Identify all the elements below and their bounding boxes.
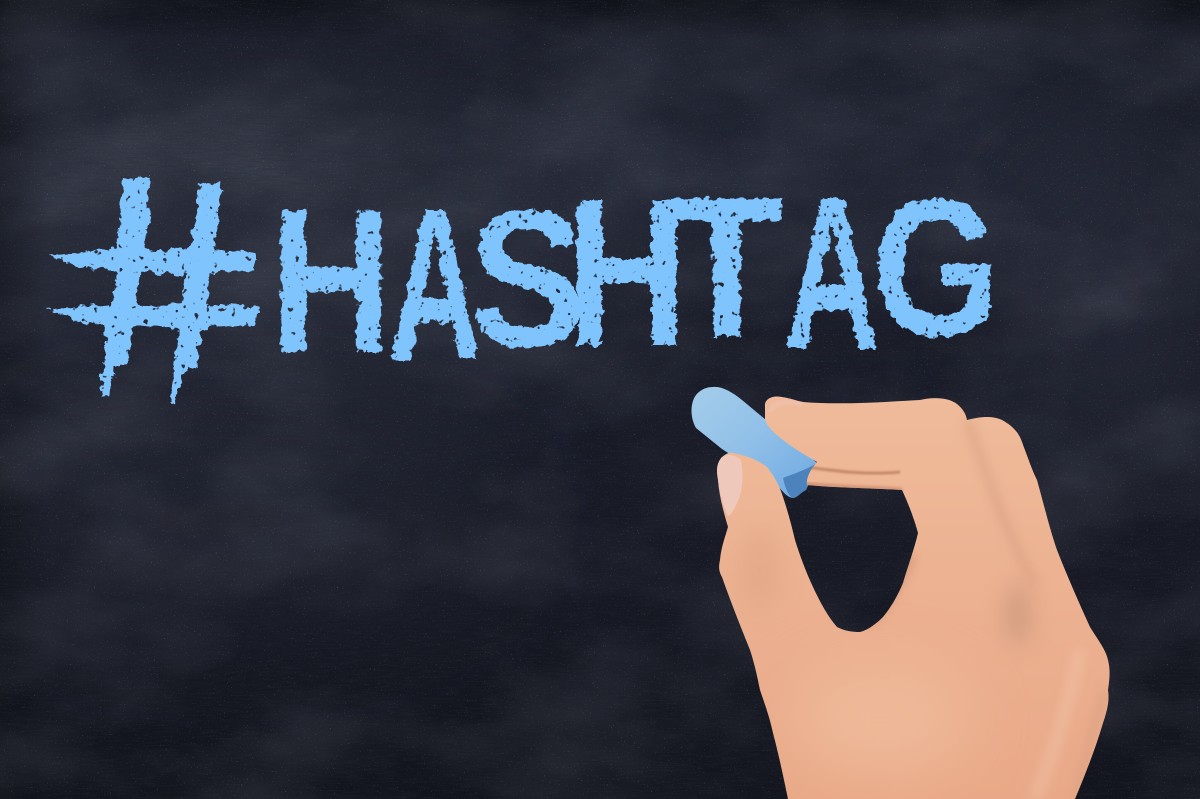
- letter G: G: [872, 159, 1000, 377]
- letter A: A: [784, 152, 880, 395]
- letter H: H: [270, 165, 392, 396]
- thumbnail: [717, 455, 743, 516]
- letter H: H: [567, 156, 687, 390]
- hash symbol: #: [57, 159, 266, 416]
- icon: blue chalk stick: [692, 387, 817, 498]
- letter A: A: [388, 164, 482, 407]
- letter S: S: [469, 170, 585, 388]
- hand holding chalk: [717, 396, 1110, 799]
- chalk writing: #HASHTAG: [46, 152, 1000, 416]
- letter T: T: [668, 156, 784, 379]
- hand shading: [738, 402, 1106, 799]
